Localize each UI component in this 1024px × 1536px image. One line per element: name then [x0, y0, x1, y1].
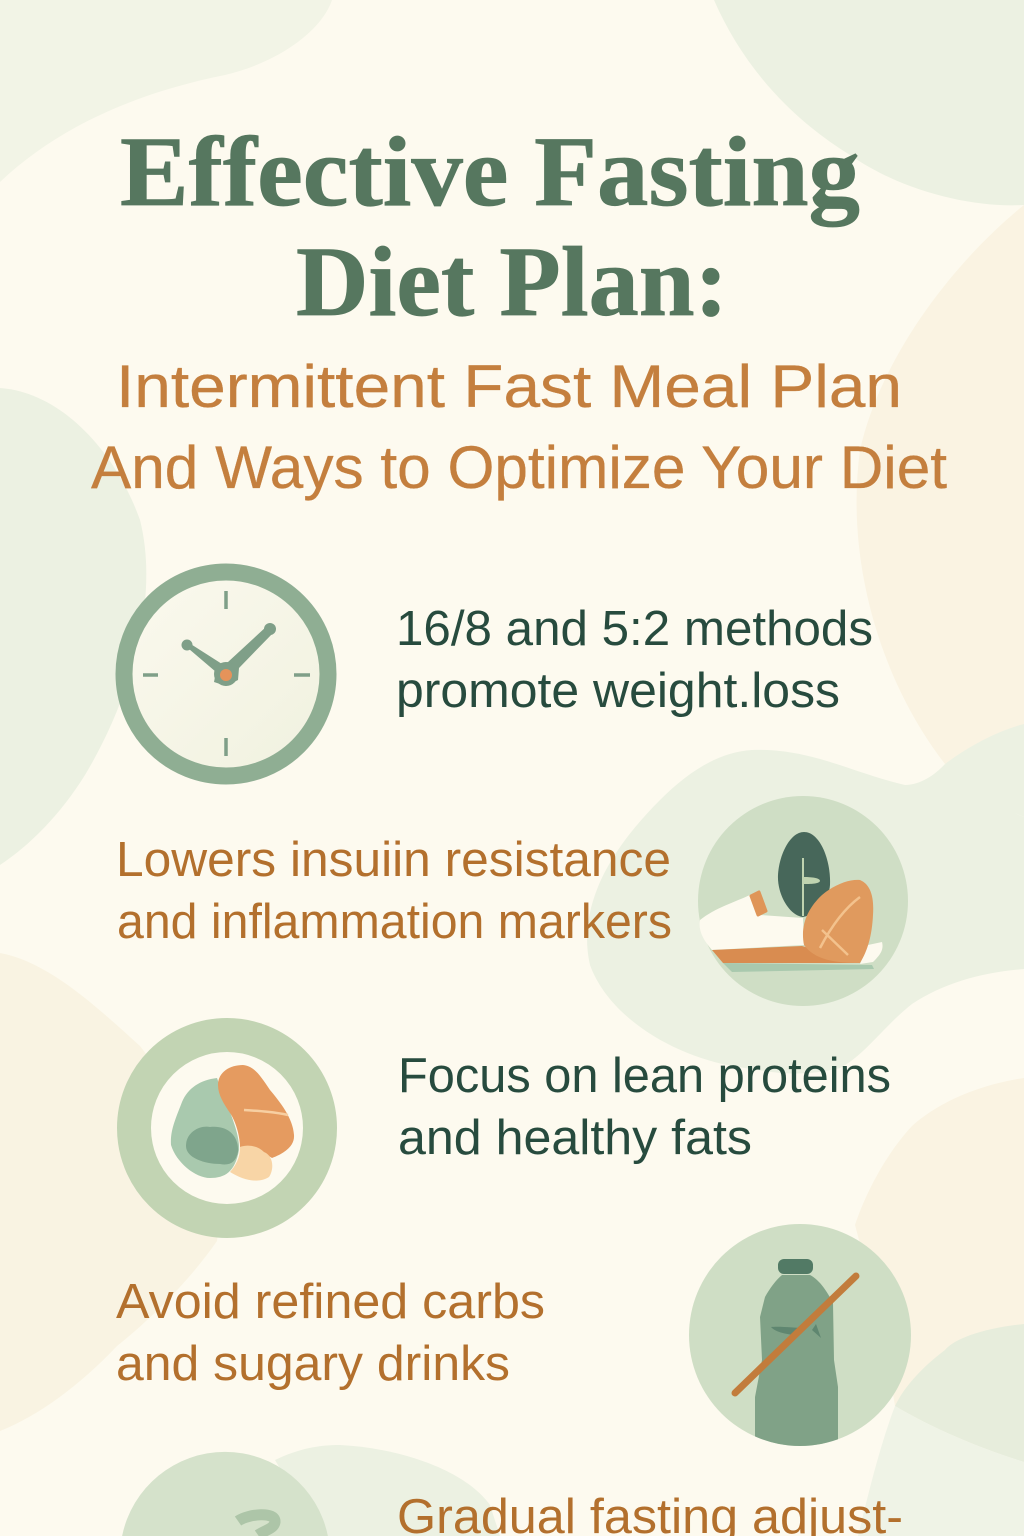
title — [120, 116, 860, 337]
text: refined carbs — [116, 1275, 545, 1391]
text: lean proteins: and healthy fats — [398, 1111, 752, 1165]
subtitle: And Ways to Optimize Your Diet — [91, 434, 947, 501]
text: lean proteins — [398, 1049, 891, 1165]
icon: plate of food — [134, 1035, 320, 1221]
title: Diet Plan: — [296, 226, 728, 337]
icon: crossed-out bottle — [689, 1224, 911, 1450]
text: 16/8 and 5:2 methods: 16/8 and 5:2 methods — [396, 602, 873, 656]
text: insulin resistance: and inflammation markers — [117, 895, 672, 949]
text: refined carbs: Avoid refined carbs — [116, 1275, 545, 1329]
subtitle: Intermittent Fast Meal Plan — [116, 353, 902, 420]
icon: leaf, bread and plate — [698, 796, 908, 1006]
text: 16/8 and 5:2 methods — [396, 602, 873, 718]
text: 16/8 and 5:2 methods: promote weight.loss — [396, 664, 840, 718]
text: insulin resistance — [116, 833, 672, 949]
text: insulin resistance: Lowers insuiin resistance — [116, 833, 671, 887]
icon: clock — [124, 572, 328, 776]
subtitle — [91, 353, 947, 501]
title: Effective Fasting — [120, 116, 860, 227]
icon: question mark badge — [122, 1452, 328, 1536]
text: refined carbs: and sugary drinks — [116, 1337, 510, 1391]
text: lean proteins: Focus on lean proteins — [398, 1049, 891, 1103]
